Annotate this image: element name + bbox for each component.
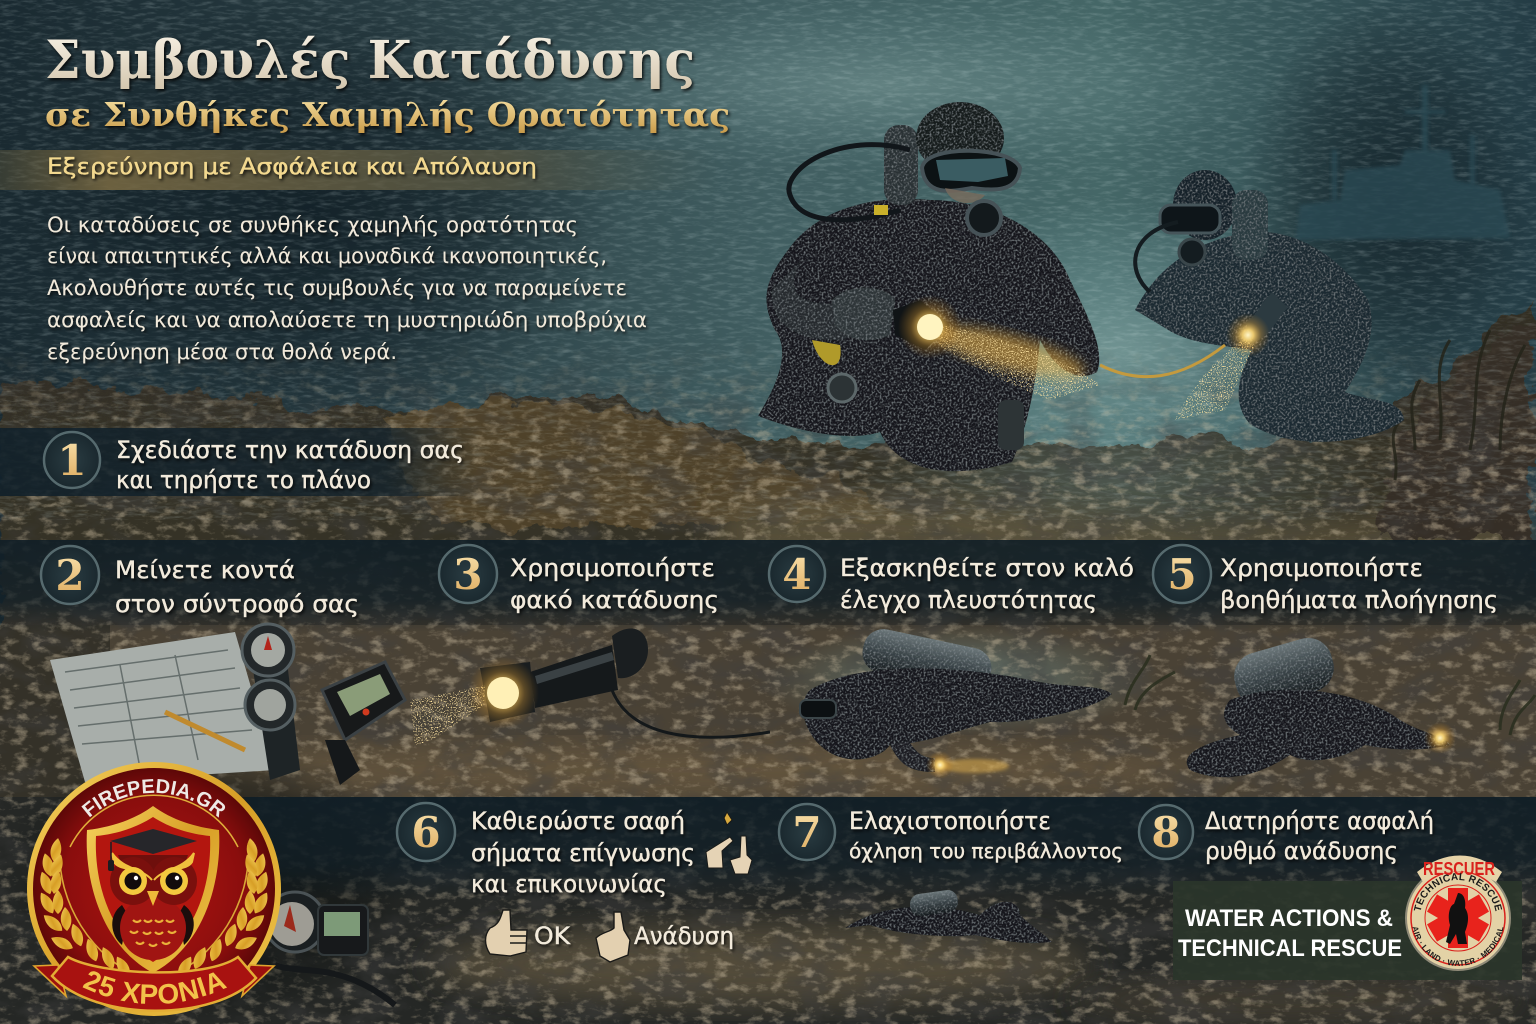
tip 2: στον σύντροφό σας <box>115 590 359 618</box>
tip 7: 7 <box>792 808 822 857</box>
diver 2 in background <box>1100 170 1404 442</box>
tip 8 <box>1139 805 1434 865</box>
tip 4: έλεγχο πλευστότητας <box>840 586 1097 614</box>
tip 7: Ελαχιστοποιήστε <box>849 807 1051 835</box>
icon: OK hand signal <box>486 910 527 956</box>
tip 7: όχληση του περιβάλλοντος <box>849 839 1123 863</box>
tip 4: 4 <box>782 550 812 599</box>
tip 5: 5 <box>1167 550 1197 599</box>
tip 3: 3 <box>453 550 483 599</box>
tip 1 <box>44 432 464 494</box>
intro text: Οι καταδύσεις σε συνθήκες χαμηλής ορατότητας <box>47 213 578 237</box>
tip 8: 8 <box>1151 808 1181 857</box>
shield with owl <box>87 806 219 973</box>
diver 1 in foreground <box>758 102 1270 471</box>
tip 2 <box>41 546 359 618</box>
tip 8: Διατηρήστε ασφαλή <box>1205 807 1434 835</box>
tip 4 <box>769 546 1134 614</box>
tip 1: Σχεδιάστε την κατάδυση σας <box>116 436 464 464</box>
label: ascent: Ανάδυση <box>634 922 734 950</box>
tip 8: ρυθμό ανάδυσης <box>1205 837 1398 865</box>
seaweed right <box>1393 330 1525 480</box>
icon: ascend hand signal <box>596 912 630 962</box>
illustration: dive torch <box>410 628 770 745</box>
illustration: diver using navigation aids <box>1187 632 1456 777</box>
tip 6: και επικοινωνίας <box>471 870 667 898</box>
tip 5: Χρησιμοποιήστε <box>1220 554 1423 582</box>
rescue text: WATER ACTIONS & <box>1185 905 1393 932</box>
tagline band <box>0 150 720 190</box>
illustration: compass and computer at bottom <box>265 892 395 1005</box>
rescue text: TECHNICAL RESCUE <box>1178 935 1402 962</box>
tip 5 <box>1153 545 1498 614</box>
tip 2: 2 <box>55 551 85 600</box>
intro text: Ακολουθήστε αυτές τις συμβουλές για να παραμείνετε <box>47 276 627 300</box>
logo text: FIREPEDIA.GR <box>82 779 226 818</box>
tip 3: Χρησιμοποιήστε <box>510 554 715 582</box>
tip 6 <box>397 803 695 898</box>
ribbon banner: 25 ΧΡΟΝΙΑ <box>82 971 227 1004</box>
logo: firepedia 25 years <box>27 762 281 1016</box>
tip 7 <box>779 804 1123 863</box>
tip 6: σήματα επίγνωσης <box>471 839 695 867</box>
tip 3: φακό κατάδυσης <box>510 586 719 614</box>
tip 6: Καθιερώστε σαφή <box>471 807 685 835</box>
title: Συμβουλές Κατάδυσης <box>45 30 695 91</box>
ribbon banner <box>32 955 276 1012</box>
label: OK: OK <box>534 922 571 950</box>
intro text: είναι απαιτητικές αλλά και μοναδικά ικανοποιητικές, <box>47 244 607 268</box>
intro text: ασφαλείς και να απολαύσετε τη μυστηριώδη υποβρύχια <box>47 308 647 332</box>
seaweed row 2 <box>1125 655 1535 735</box>
shipwreck silhouette <box>1296 85 1510 240</box>
tip 2: Μείνετε κοντά <box>115 556 295 584</box>
tip 5: βοηθήματα πλοήγησης <box>1220 586 1498 614</box>
tip 3 <box>439 545 719 614</box>
rescue badge <box>1405 856 1511 971</box>
tagline band: Εξερεύνηση με Ασφάλεια και Απόλαυση <box>47 155 537 180</box>
laurel wreath <box>36 837 272 982</box>
band behind tip 1 <box>0 428 480 496</box>
illustration: diver practising buoyancy <box>800 625 1112 779</box>
rescue badge: RESCUER <box>1423 859 1495 879</box>
icon: small hand signals <box>706 812 752 874</box>
rescue text <box>1178 905 1402 962</box>
rescue badge: TECHNICAL RESCUE <box>1414 873 1502 912</box>
tip 1: και τηρήστε το πλάνο <box>116 466 371 494</box>
tip 1: 1 <box>57 436 87 485</box>
intro text: εξερεύνηση μέσα στα θολά νερά. <box>47 340 397 364</box>
band behind tips 6 to 8 <box>245 797 1536 900</box>
illustration: dive plan, compasses and dive computer <box>50 624 405 785</box>
intro text <box>47 213 647 364</box>
subtitle: σε Συνθήκες Χαμηλής Ορατότητας <box>45 95 730 134</box>
tip 6: 6 <box>411 808 441 857</box>
band behind tips 2 to 5 <box>0 540 1536 632</box>
tip 4: Εξασκηθείτε στον καλό <box>840 554 1134 582</box>
rescue badge: AIR · LAND · WATER · MEDICAL <box>1412 927 1504 966</box>
panel: water actions and technical rescue <box>1173 856 1522 980</box>
illustration: small diver minimising disturbance <box>845 889 1052 943</box>
